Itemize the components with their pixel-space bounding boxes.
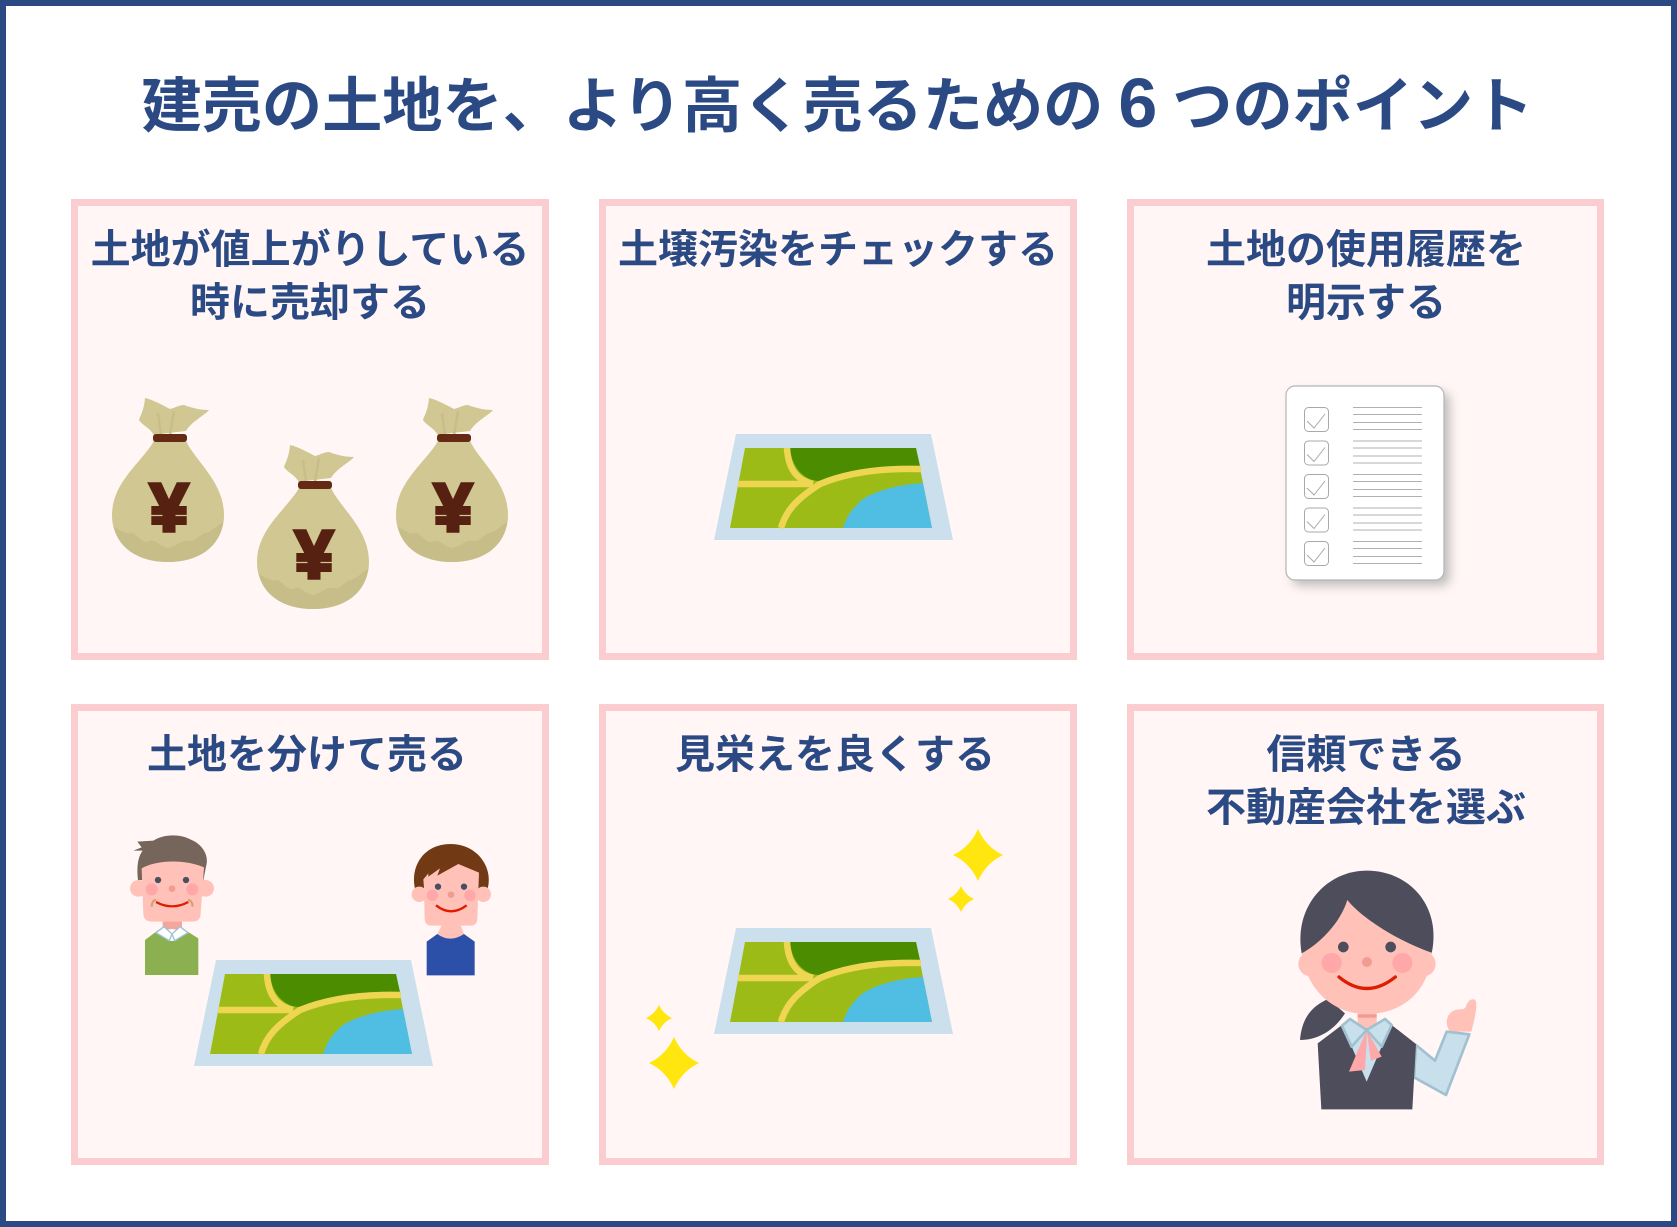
icon: money bag middle [257,445,369,609]
icon: money bag left [112,398,224,562]
icon: money bag middle: ¥ [295,517,333,593]
icon: land map [714,434,953,540]
panel: subdivide the land [71,704,549,1165]
icon: older man [130,835,214,975]
icon: money bags [112,398,508,609]
heading: reliable agency: 信頼できる [1266,733,1466,777]
heading: sell when rising: 時に売却する [190,281,430,325]
panel: improve appearance [599,704,1077,1165]
icon: money bag left: ¥ [150,470,188,546]
heading: subdivide: 土地を分けて売る [147,733,467,777]
heading: sell when rising: 土地が値上がりしている [91,228,529,272]
heading: usage history [1206,228,1526,325]
heading: usage history: 土地の使用履歴を [1206,228,1526,272]
panel: disclose land use history [1127,199,1604,660]
icon: young man [412,844,491,975]
icon: agent woman [1298,871,1476,1109]
heading: sell when rising [91,228,529,325]
icon: money bag right: ¥ [434,470,472,546]
heading: reliable agency [1206,733,1526,830]
heading: usage history: 明示する [1286,281,1446,325]
icon: sparkles [646,829,1003,1089]
icon: land map [194,960,433,1066]
panel: sell when land price rises [71,199,549,660]
heading: appearance: 見栄えを良くする [675,733,995,777]
heading: soil check: 土壌汚染をチェックする [618,228,1058,272]
panel: choose a reliable agency [1127,704,1604,1165]
title: 建売の土地を、より高く売るための6つのポイント [142,64,1533,142]
heading: reliable agency: 不動産会社を選ぶ [1206,786,1526,830]
panel: check soil contamination [599,199,1077,660]
icon: money bag right [396,398,508,562]
icon: checklist document [1286,386,1450,586]
icon: land map [714,928,953,1034]
